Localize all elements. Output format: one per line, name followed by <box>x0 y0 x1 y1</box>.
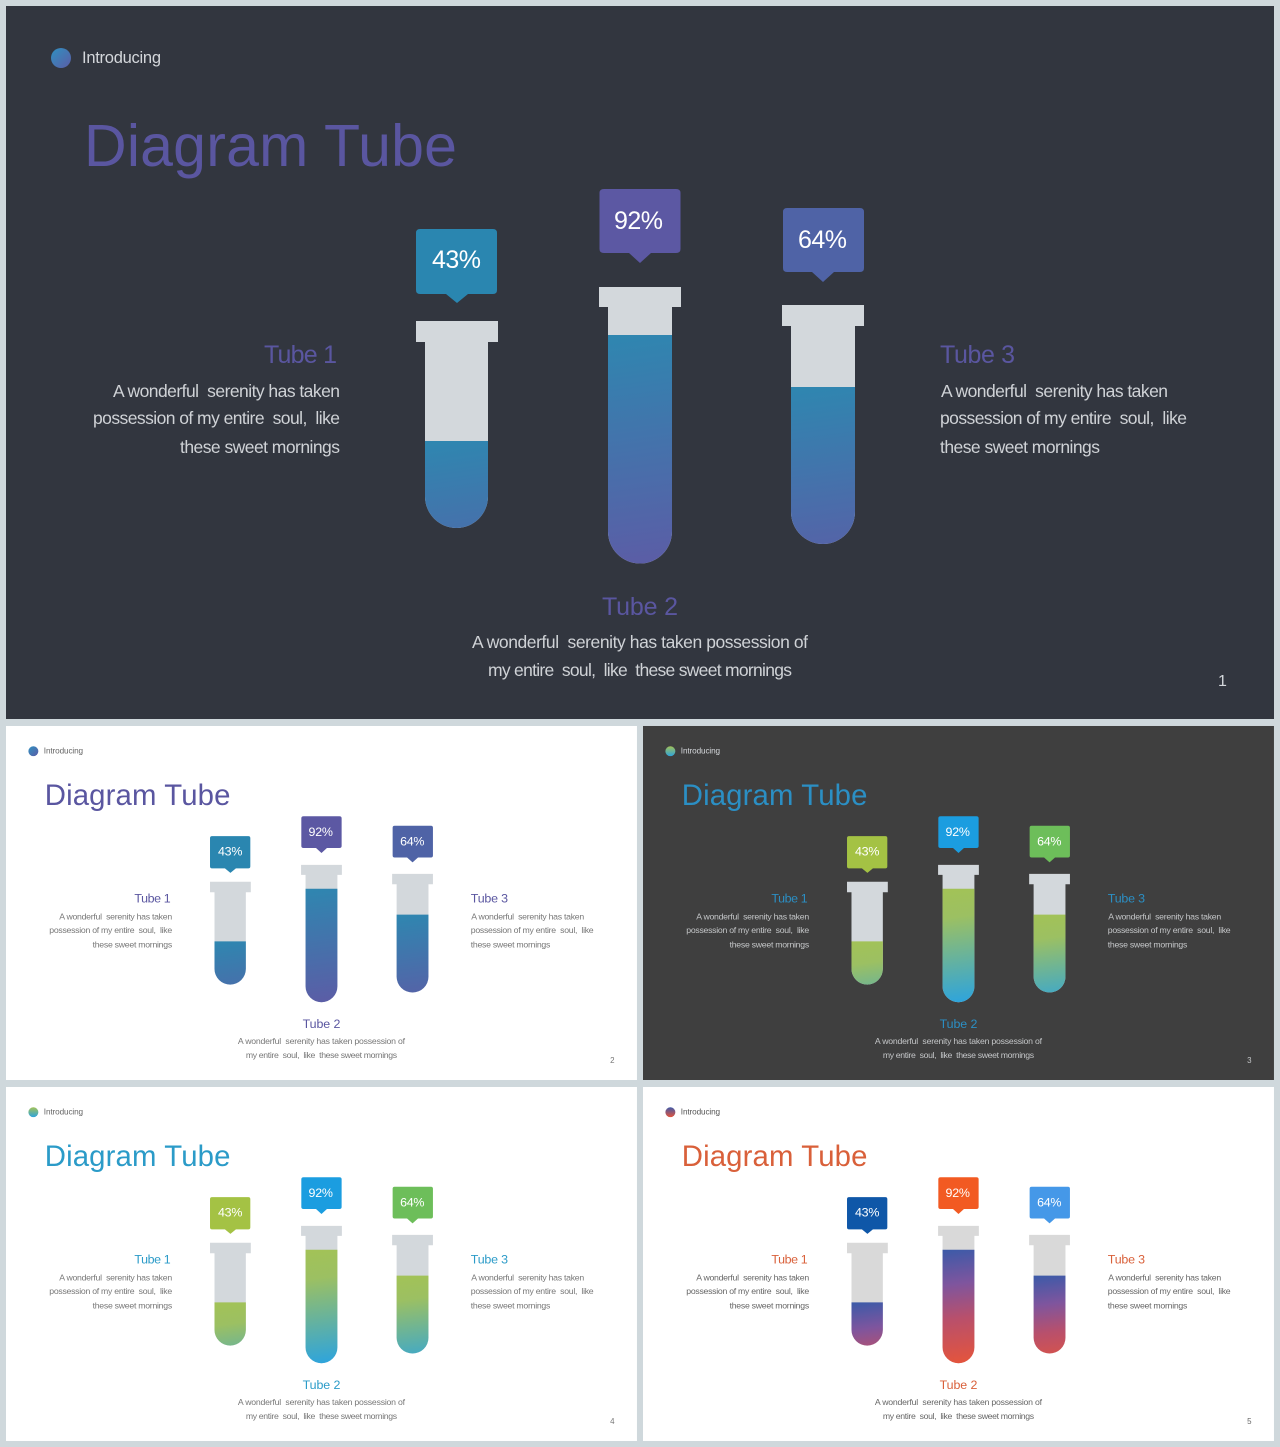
callout 43% <box>847 836 887 873</box>
text block: tube 3: Tube 3 <box>1108 1253 1145 1267</box>
title: Diagram Tube <box>45 1140 230 1173</box>
text block: tube 2: A wonderful serenity has taken possession of <box>238 1036 406 1046</box>
text block: tube 3: Tube 3 <box>1108 892 1145 906</box>
callout 92% <box>301 816 342 853</box>
text block: tube 2: my entire soul, like these sweet mornings <box>883 1050 1035 1060</box>
callout 92%: 92% <box>309 825 333 839</box>
text block: tube 2: my entire soul, like these sweet mornings <box>488 660 792 680</box>
callout 43% <box>847 1197 887 1234</box>
callout 64% <box>393 826 433 862</box>
page number: 4 <box>610 1417 615 1426</box>
section label: Introducing <box>681 747 721 756</box>
text block: tube 1: possession of my entire soul, like <box>686 1286 809 1296</box>
text block: tube 3: Tube 3 <box>471 1253 508 1267</box>
tube 1 at 43% <box>416 321 498 528</box>
text block: tube 1: A wonderful serenity has taken <box>696 912 809 922</box>
text block: tube 3: A wonderful serenity has taken <box>1108 912 1221 922</box>
callout 64%: 64% <box>400 835 424 849</box>
text block: tube 3: these sweet mornings <box>471 939 551 949</box>
callout 43% <box>210 836 250 873</box>
text block: tube 2: A wonderful serenity has taken possession of <box>875 1036 1043 1046</box>
callout 64%: 64% <box>1037 1196 1061 1210</box>
text block: tube 1: Tube 1 <box>771 892 808 906</box>
text block: tube 1: possession of my entire soul, like <box>686 925 809 935</box>
text block: tube 1: these sweet mornings <box>93 939 173 949</box>
text block: tube 1: Tube 1 <box>134 1253 171 1267</box>
text block: tube 3: these sweet mornings <box>940 437 1100 457</box>
callout 92%: 92% <box>309 1186 333 1200</box>
text block: tube 3: A wonderful serenity has taken <box>471 912 584 922</box>
text block: tube 1: A wonderful serenity has taken <box>696 1273 809 1283</box>
text block: tube 2: Tube 2 <box>940 1017 977 1031</box>
text block: tube 2: my entire soul, like these sweet mornings <box>246 1411 398 1421</box>
text block: tube 1: these sweet mornings <box>730 939 810 949</box>
callout 64% <box>1030 1187 1070 1223</box>
text block: tube 1: these sweet mornings <box>730 1300 810 1310</box>
text block: tube 3: A wonderful serenity has taken <box>1108 1273 1221 1283</box>
text block: tube 1: Tube 1 <box>264 341 337 369</box>
callout 92% <box>938 1177 979 1214</box>
text block: tube 1: A wonderful serenity has taken <box>59 912 172 922</box>
text block: tube 3: possession of my entire soul, like <box>1108 925 1231 935</box>
title: Diagram Tube <box>45 779 230 812</box>
text block: tube 1 <box>93 341 340 457</box>
callout 43%: 43% <box>218 844 242 858</box>
text block: tube 2: A wonderful serenity has taken possession of <box>238 1397 406 1407</box>
text block: tube 1: possession of my entire soul, like <box>93 408 340 428</box>
icon: section dot <box>28 746 38 756</box>
panel: slide 1 dark blue theme <box>6 6 1274 719</box>
page number: 3 <box>1247 1056 1252 1065</box>
tube 2 at 92% <box>938 1226 979 1363</box>
text block: tube 1: Tube 1 <box>771 1253 808 1267</box>
text block: tube 3: A wonderful serenity has taken <box>471 1273 584 1283</box>
tube 1 at 43% <box>210 882 251 985</box>
text block: tube 3: possession of my entire soul, like <box>940 408 1187 428</box>
text block: tube 1: possession of my entire soul, like <box>49 925 172 935</box>
tube 3 at 64% <box>392 1235 433 1354</box>
icon: section dot <box>28 1107 38 1117</box>
text block: tube 1: Tube 1 <box>134 892 171 906</box>
callout 64% <box>783 208 864 282</box>
callout 43%: 43% <box>218 1205 242 1219</box>
tube 3 at 64% <box>1029 874 1070 993</box>
callout 43%: 43% <box>432 246 481 274</box>
callout 43%: 43% <box>855 844 879 858</box>
tube 1 at 43% <box>847 882 888 985</box>
text block: tube 3: Tube 3 <box>940 341 1015 369</box>
text block: tube 2 <box>875 1017 1043 1060</box>
text block: tube 2: A wonderful serenity has taken possession of <box>875 1397 1043 1407</box>
text block: tube 1: possession of my entire soul, like <box>49 1286 172 1296</box>
page number: 1 <box>1218 673 1227 690</box>
text block: tube 3: possession of my entire soul, like <box>471 925 594 935</box>
text block: tube 1 <box>49 892 173 949</box>
tube 2 at 92% <box>599 287 681 564</box>
text block: tube 2: Tube 2 <box>602 593 678 621</box>
text block: tube 3: these sweet mornings <box>1108 939 1188 949</box>
text block: tube 3: Tube 3 <box>471 892 508 906</box>
tube 2 at 92% <box>301 865 342 1002</box>
text block: tube 1: these sweet mornings <box>93 1300 173 1310</box>
title: Diagram Tube <box>682 1140 867 1173</box>
section label: Introducing <box>681 1108 721 1117</box>
panel: slide 2 white blue theme <box>6 726 637 1080</box>
callout 64%: 64% <box>1037 835 1061 849</box>
tube 3 at 64% <box>392 874 433 993</box>
text block: tube 1: these sweet mornings <box>180 437 340 457</box>
text block: tube 1: A wonderful serenity has taken <box>59 1273 172 1283</box>
title: Diagram Tube <box>682 779 867 812</box>
callout 92% <box>938 816 979 853</box>
text block: tube 3 <box>471 1253 594 1310</box>
text block: tube 3 <box>1108 1253 1231 1310</box>
tube 3 at 64% <box>782 305 864 544</box>
callout 64%: 64% <box>400 1196 424 1210</box>
text block: tube 1 <box>686 1253 810 1310</box>
page number: 5 <box>1247 1417 1252 1426</box>
panel: slide 3 dark green theme <box>643 726 1274 1080</box>
text block: tube 2: my entire soul, like these sweet mornings <box>246 1050 398 1060</box>
panel: slide 5 white red theme <box>643 1087 1274 1441</box>
text block: tube 3: A wonderful serenity has taken <box>941 381 1168 401</box>
callout 64% <box>393 1187 433 1223</box>
callout 92%: 92% <box>946 825 970 839</box>
section label: Introducing <box>44 1108 84 1117</box>
icon: section dot <box>665 1107 675 1117</box>
text block: tube 2: Tube 2 <box>303 1017 340 1031</box>
callout 92% <box>301 1177 342 1214</box>
tube 1 at 43% <box>210 1243 251 1346</box>
callout 92% <box>600 189 680 263</box>
tube 3 at 64% <box>1029 1235 1070 1354</box>
text block: tube 3: possession of my entire soul, like <box>1108 1286 1231 1296</box>
section label: Introducing <box>82 49 161 67</box>
text block: tube 1: A wonderful serenity has taken <box>113 381 340 401</box>
icon: section dot <box>665 746 675 756</box>
tube 1 at 43% <box>847 1243 888 1346</box>
text block: tube 2: Tube 2 <box>940 1378 977 1392</box>
text block: tube 3 <box>940 341 1187 457</box>
section label: Introducing <box>44 747 84 756</box>
title: Diagram Tube <box>84 113 457 179</box>
callout 92%: 92% <box>614 207 663 235</box>
callout 43% <box>416 229 497 303</box>
text block: tube 2: A wonderful serenity has taken possession of <box>472 632 808 652</box>
callout 92%: 92% <box>946 1186 970 1200</box>
text block: tube 2 <box>238 1378 406 1421</box>
text block: tube 2 <box>472 593 808 680</box>
tube 2 at 92% <box>301 1226 342 1363</box>
text block: tube 2: my entire soul, like these sweet mornings <box>883 1411 1035 1421</box>
text block: tube 1 <box>49 1253 173 1310</box>
panel: slide 4 white green theme <box>6 1087 637 1441</box>
text block: tube 3: these sweet mornings <box>471 1300 551 1310</box>
text block: tube 1 <box>686 892 810 949</box>
text block: tube 2: Tube 2 <box>303 1378 340 1392</box>
page number: 2 <box>610 1056 615 1065</box>
callout 64%: 64% <box>798 226 847 254</box>
callout 64% <box>1030 826 1070 862</box>
callout 43%: 43% <box>855 1205 879 1219</box>
text block: tube 3: possession of my entire soul, like <box>471 1286 594 1296</box>
text block: tube 3 <box>471 892 594 949</box>
text block: tube 2 <box>875 1378 1043 1421</box>
callout 43% <box>210 1197 250 1234</box>
text block: tube 3: these sweet mornings <box>1108 1300 1188 1310</box>
icon: section dot <box>51 48 71 68</box>
tube 2 at 92% <box>938 865 979 1002</box>
text block: tube 2 <box>238 1017 406 1060</box>
text block: tube 3 <box>1108 892 1231 949</box>
